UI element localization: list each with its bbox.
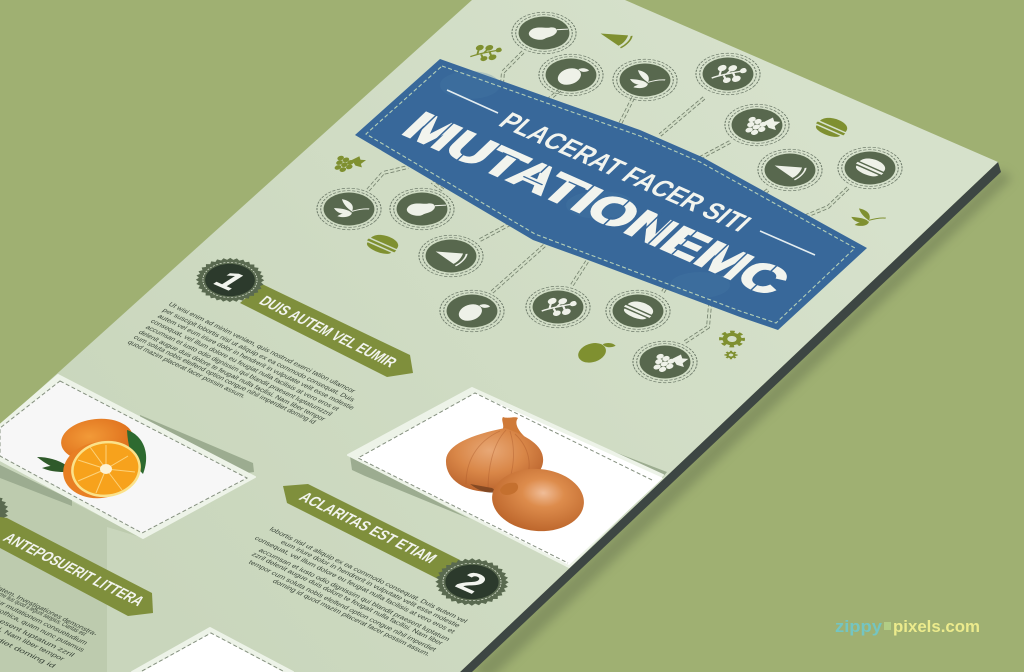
section 1 ribbon bbox=[240, 284, 413, 377]
section 2 body text: zzril delenit augue duis dolore te feugait nulla facilisi. Nam liber bbox=[250, 551, 446, 647]
section 1 body text: per suscipit lobortis nisl ut aliquip ex ea commodo consequat. Duis bbox=[161, 307, 357, 403]
section 1 body text: autem vel eum iriure dolor in hendrerit in vulputate velit esse molestie bbox=[156, 313, 356, 411]
folded panel tone bbox=[0, 465, 143, 672]
image card: onions bbox=[348, 388, 667, 567]
image card: third, cropped bbox=[132, 628, 293, 672]
watermark logo bbox=[835, 617, 980, 636]
icon ring: pizza left bbox=[406, 227, 496, 285]
section 1 body text: cum soluta nobis eleifend option congue nihil imperdiet doming id bbox=[132, 334, 318, 425]
title banner bbox=[355, 59, 867, 330]
icon ring: pear top bbox=[499, 4, 589, 62]
section 2 ribbon bbox=[283, 484, 460, 580]
olive icon: pizza bbox=[597, 26, 634, 48]
olive icon: herb bbox=[467, 40, 505, 65]
orange fruit bbox=[37, 415, 146, 503]
section 2 body text: eum iriure dolor in hendrerit in vulputate velit esse molestie bbox=[279, 539, 462, 629]
section 2 number badge: 2 bbox=[448, 566, 494, 600]
icon ring: pear left bbox=[377, 180, 467, 238]
section 1 body text: delenit augue duis dolore te feugait nulla facilisi. Nam liber tempor bbox=[137, 329, 328, 423]
section 1 body text: consequat, vel illum dolore eu feugiat nulla facilisis at vero eros et bbox=[149, 318, 342, 413]
title: MUTATIONEMC bbox=[393, 104, 800, 304]
section 1 number badge: 1 bbox=[207, 265, 250, 297]
section 2 body text: tempor cum soluta nobis eleifend option congue nihil imperdiet bbox=[247, 559, 439, 653]
icon ring: banana left bbox=[304, 180, 394, 238]
icon ring: apple bottom bbox=[427, 282, 517, 340]
icon ring: banana top bbox=[600, 51, 690, 109]
paper thickness edge bbox=[460, 162, 1001, 672]
section 3 ribbon bbox=[0, 517, 153, 616]
section 2 body text: consequat, vel illum dolore eu feugiat nulla facilisis at vero eros et bbox=[253, 535, 458, 635]
olive icon: gears bbox=[717, 329, 747, 360]
section 2 body text: accumsan et iusto odio dignissim qui blandit praesent luptatum bbox=[257, 547, 452, 643]
icon ring: apple top bbox=[526, 46, 616, 104]
connector lines bbox=[368, 52, 848, 342]
section 1 body text: Ut wisi enim ad minim veniam, quis nostrud exerci tation ullamcor bbox=[167, 301, 358, 395]
icon ring: grapes bottom bbox=[620, 333, 710, 391]
icon ring: burger right bbox=[825, 139, 915, 197]
section 2 number badge bbox=[421, 549, 523, 615]
olive icon: banana bbox=[846, 207, 886, 232]
icon ring: pizza right bbox=[745, 141, 835, 199]
subtitle: PLACERAT FACER SITI bbox=[492, 107, 758, 237]
section 3 number badge bbox=[0, 478, 23, 544]
section 3 body text bbox=[0, 576, 100, 669]
title rule right bbox=[760, 231, 815, 255]
olive icon: burger left bbox=[362, 231, 404, 257]
icon ring: herb bottom bbox=[513, 278, 603, 336]
icon ring: herb top bbox=[683, 45, 773, 103]
section 1 number badge bbox=[182, 249, 278, 311]
olive icon: grapes bbox=[328, 150, 369, 177]
section 1 ribbon: DUIS AUTEM VEL EUMIR bbox=[255, 293, 401, 370]
section 2 body text: lobortis nisl ut aliquip ex ea commodo consequat. Duis autem vel bbox=[268, 526, 470, 625]
section 1 body text: quod mazim placerat facer possim assum. bbox=[126, 339, 248, 400]
onion fruits bbox=[446, 417, 587, 535]
section 2 body text: doming id quod mazim placerat facer possim assum. bbox=[271, 578, 433, 658]
olive icon: burger right bbox=[811, 114, 853, 140]
section 1 body text: accumsan et iusto odio dignissim qui blandit praesent luptatumzzril bbox=[144, 324, 335, 418]
icon ring: burger bottom bbox=[593, 282, 683, 340]
icon ring: grapes right bbox=[712, 96, 802, 154]
image card: orange bbox=[0, 375, 255, 538]
watermark logo: pixels.com bbox=[893, 617, 980, 636]
section 3 ribbon: ANTEPOSUERIT LITTERA bbox=[0, 530, 149, 609]
section 2 ribbon: ACLARITAS EST ETIAM bbox=[295, 489, 441, 566]
title rule left bbox=[447, 90, 498, 113]
paper shadow bbox=[470, 170, 1012, 672]
olive icon: apple bbox=[572, 336, 616, 366]
watermark logo: zippy bbox=[835, 617, 883, 636]
